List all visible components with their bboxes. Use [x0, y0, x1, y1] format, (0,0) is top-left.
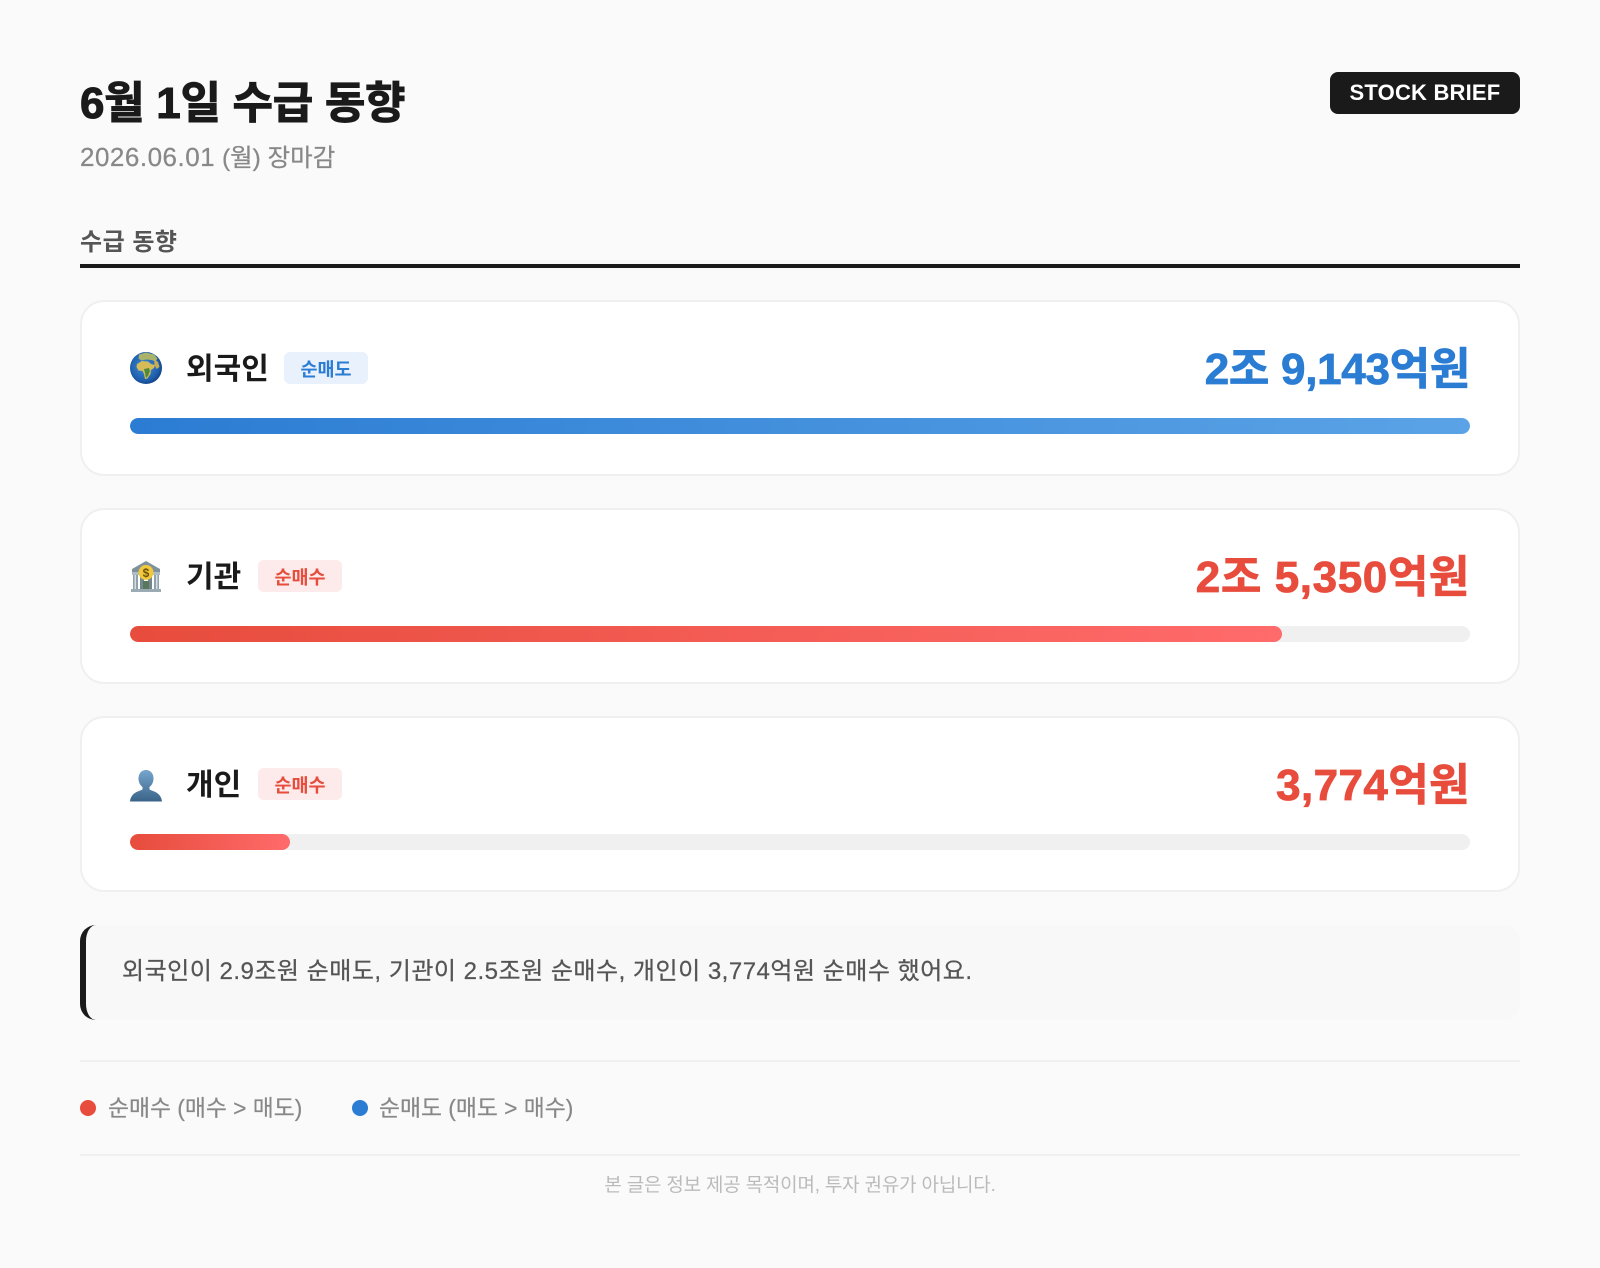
- icon: bank: $: [143, 566, 150, 580]
- label: institutions: 기관: [186, 561, 241, 594]
- section heading: 수급 동향: [80, 229, 178, 256]
- brand badge: STOCK BRIEF: [1350, 80, 1500, 105]
- label: foreign investors: 외국인: [186, 353, 269, 386]
- callout: summary: 외국인이 2.9조원 순매도, 기관이 2.5조원 순매수, 개인이 3,774억원 순매수 했어요.: [122, 958, 973, 985]
- bar: institutions: [130, 626, 1470, 642]
- tag: net buy: 순매수: [274, 775, 326, 796]
- icon: bank: [131, 561, 161, 592]
- footer disclaimer: 본 글은 정보 제공 목적이며, 투자 권유가 아닙니다.: [604, 1175, 996, 1196]
- brand badge: [1330, 72, 1520, 114]
- icon: person silhouette: [130, 770, 162, 802]
- icon: globe: [130, 352, 162, 384]
- subtitle: date: 2026.06.01 (월) 장마감: [80, 142, 335, 172]
- label: individuals: 개인: [186, 769, 241, 802]
- section rule: [80, 264, 1520, 268]
- tag: net sell: [284, 352, 368, 384]
- tag: net buy: [258, 768, 342, 800]
- tag: net buy: 순매수: [274, 567, 326, 588]
- tag: net sell: 순매도: [300, 359, 352, 380]
- panel: foreign investors: [80, 300, 1520, 476]
- legend: [80, 1095, 573, 1122]
- divider: [80, 1154, 1520, 1156]
- panel: institutions: [80, 508, 1520, 684]
- legend item: net sell: 순매도 (매도 > 매수): [379, 1095, 573, 1121]
- divider: [80, 1060, 1520, 1062]
- value: institutions: 2조 5,350억원: [1196, 553, 1470, 602]
- legend item: net buy: 순매수 (매수 > 매도): [108, 1095, 302, 1121]
- panel: individuals: [80, 716, 1520, 892]
- bar: foreign investors: [130, 418, 1470, 434]
- tag: net buy: [258, 560, 342, 592]
- bar: individuals: [130, 834, 1470, 850]
- value: individuals: 3,774억원: [1276, 761, 1470, 810]
- title: 6월 1일 수급 동향: [80, 79, 405, 128]
- value: foreign investors: 2조 9,143억원: [1205, 345, 1470, 394]
- callout: summary: [80, 925, 1520, 1020]
